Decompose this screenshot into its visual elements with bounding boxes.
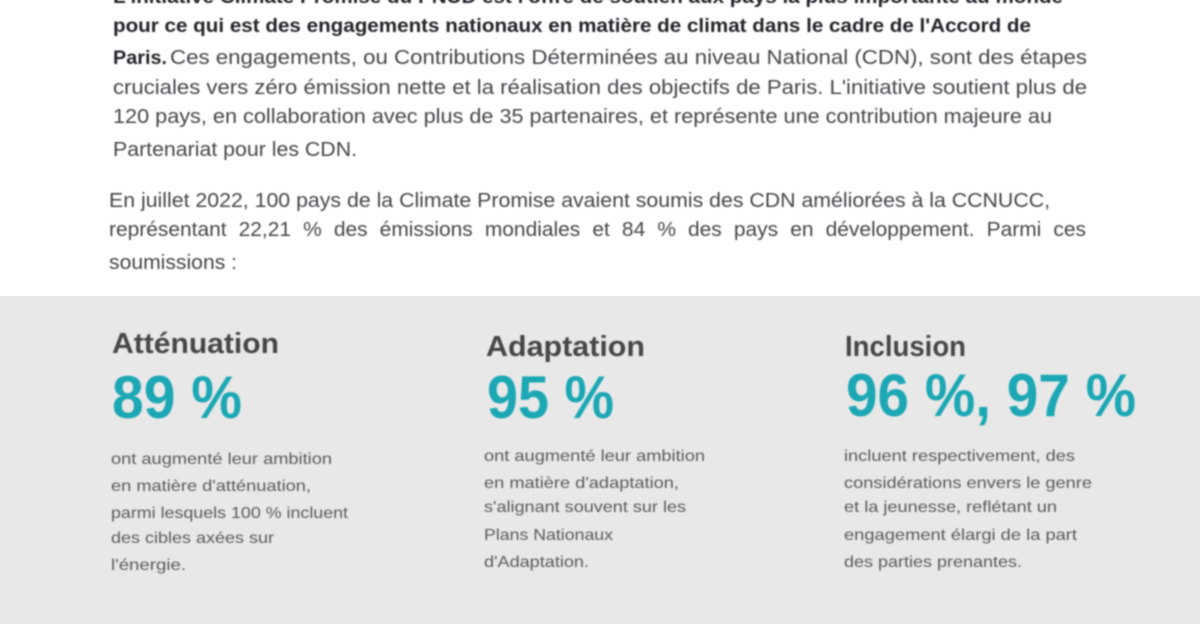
column: Atténuation: en matière d'atténuation, — [111, 478, 311, 495]
column: Adaptation: s'alignant souvent sur les — [484, 499, 686, 516]
column: Inclusion: considérations envers le genre — [844, 475, 1092, 492]
paragraph: engagements: Ces engagements, ou Contributions Déterminées au niveau National (CDN), sont des étapes — [170, 47, 1087, 69]
bold statement: pour ce qui est des engagements nationaux en matière de climat dans le cadre de l'Accord de — [113, 16, 1031, 37]
column: Inclusion — [844, 331, 1136, 571]
column: Adaptation: en matière d'adaptation, — [484, 475, 679, 492]
paragraph: juillet 2022: soumissions : — [109, 252, 237, 274]
paragraph: engagements: Partenariat pour les CDN. — [113, 139, 357, 161]
column: Adaptation: Adaptation — [486, 331, 645, 363]
column: Atténuation: Atténuation — [112, 328, 279, 360]
column: Inclusion: engagement élargi de la part — [844, 527, 1078, 544]
paragraph: engagements: cruciales vers zéro émission nette et la réalisation des objectifs de Paris. L'initiative soutient plus de — [113, 77, 1087, 99]
paragraph: juillet 2022 — [109, 190, 1086, 274]
column: Adaptation: d'Adaptation. — [484, 554, 589, 571]
column: Inclusion: des parties prenantes. — [844, 554, 1022, 571]
column: Inclusion: 96 %, 97 % — [846, 362, 1136, 429]
paragraph: juillet 2022: représentant 22,21 % des émissions mondiales et 84 % des pays en développement. Parmi ces — [109, 219, 1086, 241]
column: Adaptation — [484, 331, 705, 571]
paragraph: juillet 2022: En juillet 2022, 100 pays de la Climate Promise avaient soumis des CDN améliorées à la CCNUCC, — [109, 190, 1050, 212]
column: Atténuation: l'énergie. — [111, 557, 186, 574]
column: Adaptation: Plans Nationaux — [484, 527, 613, 544]
column: Inclusion: incluent respectivement, des — [844, 448, 1075, 465]
column: Adaptation: 95 % — [487, 364, 614, 431]
intro text block — [109, 0, 1087, 274]
paragraph: engagements: 120 pays, en collaboration avec plus de 35 partenaires, et représente une contribution majeure au — [113, 106, 1052, 128]
column: Atténuation: ont augmenté leur ambition — [111, 451, 332, 468]
column: Atténuation: parmi lesquels 100 % incluent — [111, 505, 349, 522]
column: Atténuation: des cibles axées sur — [111, 530, 275, 547]
panel: statistics — [0, 296, 1200, 624]
bold statement: Paris. — [113, 48, 167, 69]
bold statement — [113, 0, 1063, 69]
column: Adaptation: ont augmenté leur ambition — [484, 448, 705, 465]
column: Atténuation: 89 % — [112, 364, 242, 431]
column: Inclusion: Inclusion — [845, 331, 966, 363]
column: Atténuation — [111, 328, 349, 574]
column: Inclusion: et la jeunesse, reflétant un — [844, 499, 1057, 516]
paragraph: engagements — [113, 47, 1087, 161]
